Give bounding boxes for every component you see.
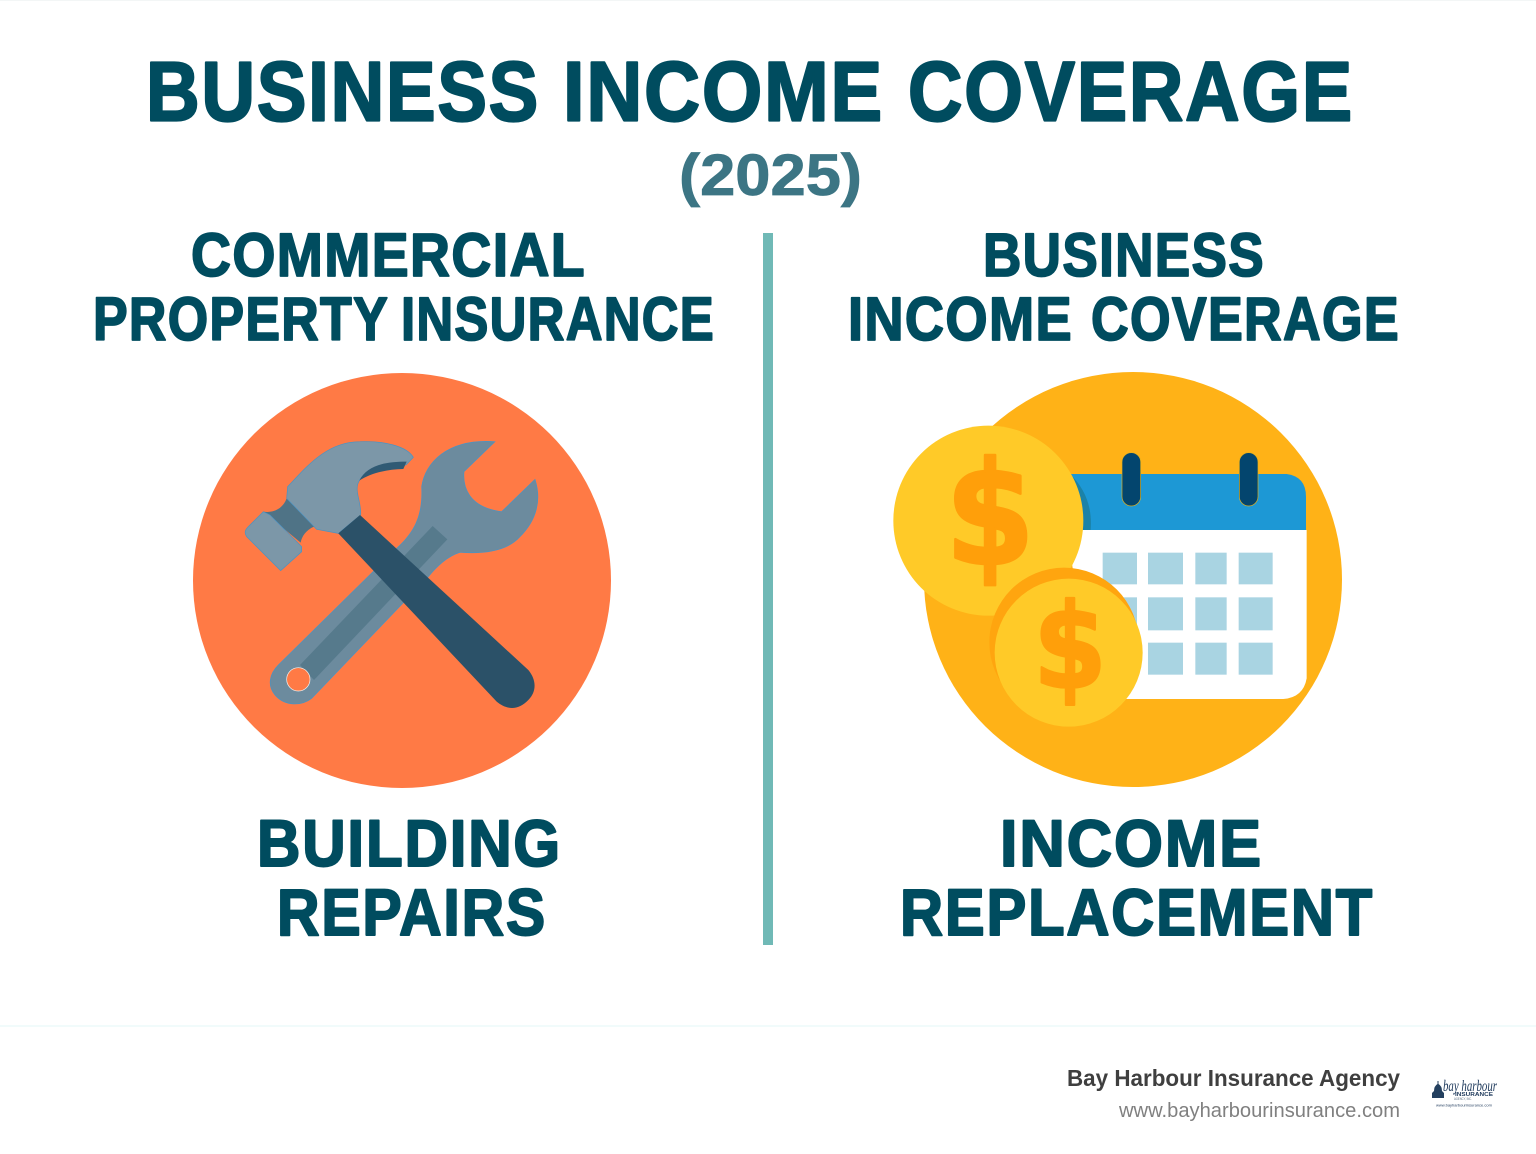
footer logo: www.bayharbourinsurance.com <box>1436 1104 1492 1108</box>
left column heading: PROPERTY <box>93 285 389 353</box>
left column caption <box>257 806 562 949</box>
footer logo <box>1432 1078 1498 1108</box>
icon: small coin <box>989 568 1143 727</box>
right column heading: INCOME <box>848 285 1073 353</box>
icon: calendar <box>1067 453 1307 699</box>
left column caption: BUILDING <box>257 806 562 880</box>
right column caption: REPLACEMENT <box>900 875 1374 949</box>
divider line <box>763 233 773 945</box>
left column caption: REPAIRS <box>277 875 547 949</box>
panel: business income coverage <box>848 221 1400 949</box>
right column heading: COVERAGE <box>1091 285 1400 353</box>
icon: large coin: $ <box>945 432 1035 599</box>
left column heading: INSURANCE <box>401 285 715 353</box>
title: INCOME <box>563 44 884 138</box>
icon: yellow circle with calendar and coins <box>893 372 1342 787</box>
title: COVERAGE <box>908 44 1354 138</box>
icon: large coin <box>893 426 1083 616</box>
right column caption: INCOME <box>1000 806 1263 880</box>
left column heading: COMMERCIAL <box>191 221 586 289</box>
left column heading <box>93 221 715 353</box>
title <box>146 44 1354 138</box>
footer logo: INSURANCE <box>1455 1092 1493 1098</box>
right column heading: BUSINESS <box>983 221 1265 289</box>
footer: agency name and website <box>1067 1065 1400 1122</box>
title: BUSINESS <box>146 44 540 138</box>
footer logo: AGENCY, INC. <box>1454 1097 1472 1101</box>
footer: agency name and website: www.bayharbourinsurance.com <box>1118 1100 1400 1122</box>
icon: hammer <box>245 442 535 708</box>
subtitle: year: (2025) <box>679 143 862 208</box>
right column heading <box>848 221 1400 353</box>
icon: wrench <box>270 441 538 704</box>
panel: commercial property insurance <box>93 221 715 949</box>
footer logo: bay harbour <box>1443 1078 1498 1095</box>
footer: agency name and website: Bay Harbour Insurance Agency <box>1067 1065 1400 1091</box>
icon: orange circle with hammer and wrench <box>193 373 611 788</box>
icon: small coin: $ <box>1033 579 1107 716</box>
right column caption <box>900 806 1374 949</box>
